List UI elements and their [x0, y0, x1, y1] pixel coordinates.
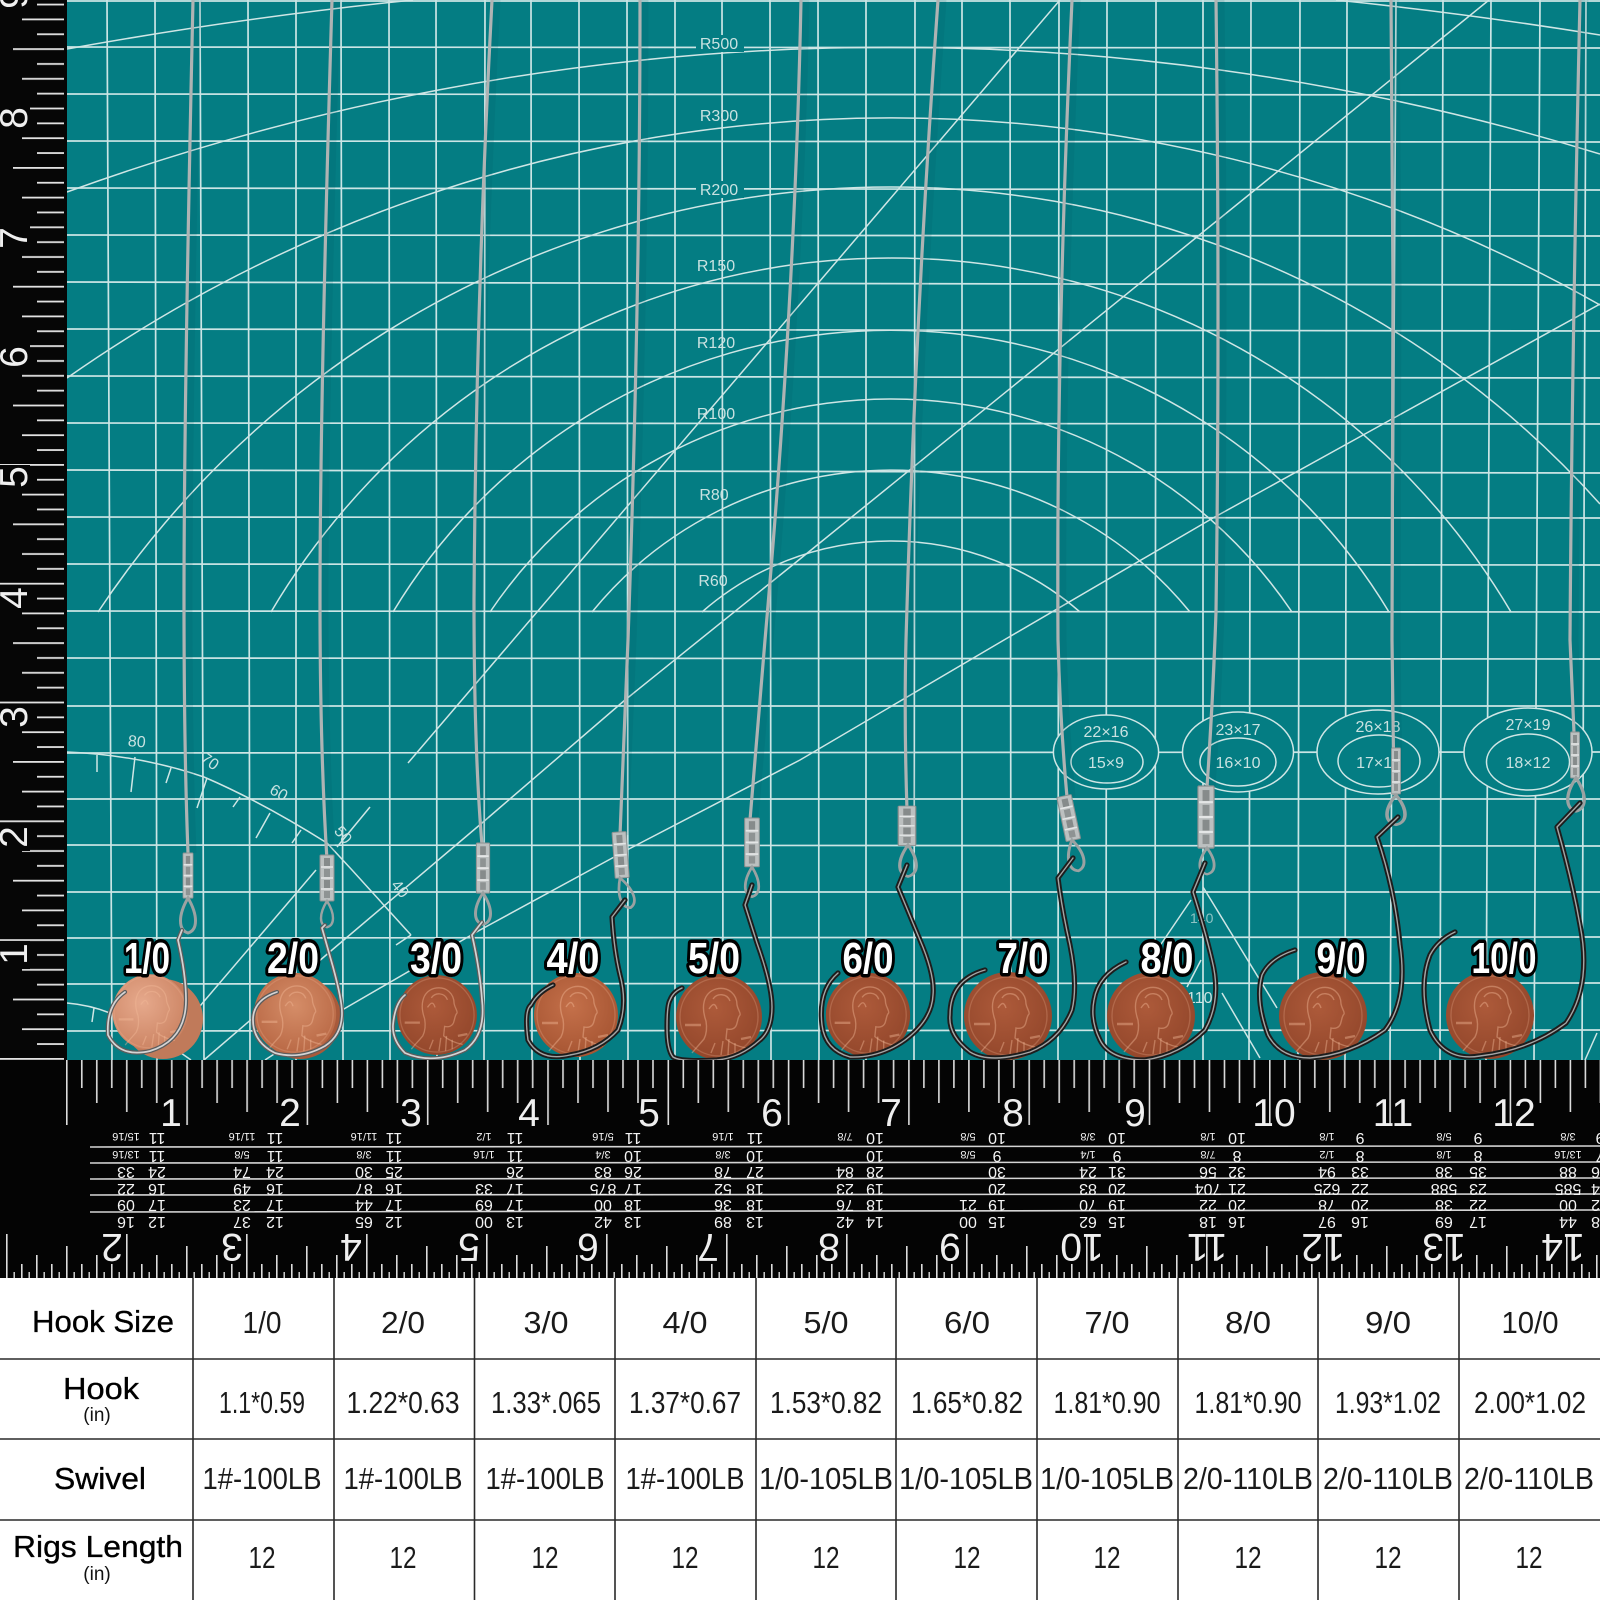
upside-down reference table values: 26	[506, 1163, 524, 1180]
hook 3/0	[393, 922, 483, 1058]
upside-down reference table values: 17	[506, 1196, 524, 1213]
upside-down reference table values: 16	[1351, 1213, 1369, 1230]
upside-down reference table values: 11	[267, 1129, 283, 1146]
size ellipses	[1053, 708, 1592, 796]
hook 5/0	[667, 885, 772, 1061]
upside-down reference table values: 13	[746, 1213, 764, 1230]
upside-down reference table values: 11	[386, 1129, 402, 1146]
upside-down reference table values	[112, 1129, 1600, 1230]
radius labels: R60	[698, 573, 728, 590]
upside-down reference table values: 65	[355, 1213, 373, 1230]
radius labels: R150	[697, 258, 735, 275]
row headers: Swivel	[54, 1461, 146, 1496]
upside-down reference table values: 23	[233, 1196, 251, 1213]
upside-down reference table values: 15	[1108, 1213, 1126, 1230]
ruler inch numbers: 1	[160, 1092, 182, 1135]
upside-down reference table values: 62	[1079, 1213, 1097, 1230]
left vertical ruler	[0, 0, 67, 1062]
upside-down reference table values: 1/2	[1319, 1148, 1335, 1160]
upside-down reference table values: 9	[1355, 1129, 1364, 1146]
row: hook dimensions: 1.22*0.63	[346, 1385, 460, 1420]
ruler inch numbers: 6	[761, 1092, 783, 1135]
hook size labels on photo: 1/0	[124, 934, 170, 983]
upside-down reference table values: 78	[1318, 1196, 1336, 1213]
row: rigs length: 12	[248, 1540, 276, 1575]
upside-down reference table values: 18	[624, 1196, 642, 1213]
upside-down reference table values: 12	[266, 1213, 284, 1230]
upside-down reference table values: 83	[594, 1163, 612, 1180]
upside-down reference table values: 16	[385, 1180, 403, 1197]
row: hook dimensions: 1.81*0.90	[1194, 1385, 1302, 1420]
upside-down reference table values: 30	[988, 1163, 1006, 1180]
upside-down reference table values: 22	[117, 1180, 135, 1197]
upside-down reference table values: 20	[988, 1180, 1006, 1197]
size ellipses: 27×19	[1506, 717, 1551, 734]
upside-down reference table values: 10	[624, 1147, 642, 1164]
row: hook size: 4/0	[662, 1305, 708, 1340]
row: hook size: 6/0	[944, 1305, 990, 1340]
row: hook dimensions: 1.1*0.59	[219, 1385, 305, 1420]
upside-down reference table values: 625	[1314, 1180, 1340, 1197]
upside-down reference table values: 27	[746, 1163, 764, 1180]
hook size labels on photo: 8/0	[1140, 934, 1194, 983]
upside-down reference table values: 10	[866, 1129, 884, 1146]
upside-down reference table values: 19	[1108, 1196, 1126, 1213]
radius labels: R120	[697, 335, 735, 352]
hook 1/0	[108, 930, 186, 1053]
upside-down reference table values: 42	[836, 1213, 854, 1230]
upside-down reference table values: 17	[1469, 1213, 1487, 1230]
upside-down reference table values: 1/4	[1080, 1148, 1096, 1160]
upside-down reference table values: 16	[266, 1180, 284, 1197]
ruler inch numbers: 4	[518, 1092, 540, 1135]
upside-down ruler numbers: 2	[101, 1225, 123, 1268]
upside-down reference table values: 94	[1318, 1163, 1336, 1180]
row: hook dimensions: 1.81*0.90	[1054, 1385, 1160, 1420]
protractor degree labels: 80	[127, 733, 146, 752]
crimp sleeves and wire loops	[180, 732, 1584, 933]
ruler inch numbers: 3	[400, 1092, 422, 1135]
upside-down reference table values: 19	[988, 1196, 1006, 1213]
upside-down reference table values: 30	[355, 1163, 373, 1180]
row: rigs length: 12	[1374, 1540, 1402, 1575]
upside-down reference table values: 588	[1431, 1180, 1457, 1197]
ruler inch numbers: 7	[880, 1092, 902, 1135]
upside-down reference table values: 17	[624, 1180, 642, 1197]
row headers: (in)	[83, 1564, 111, 1585]
upside-down reference table values: 78	[714, 1163, 732, 1180]
upside-down reference table values: 11	[625, 1129, 641, 1146]
row: swivel: 1#-100LB	[486, 1461, 604, 1496]
row: rigs length	[248, 1540, 1542, 1575]
row: rigs length: 12	[390, 1540, 416, 1575]
table rules	[0, 1278, 1600, 1600]
row: rigs length: 12	[532, 1540, 558, 1575]
row: swivel: 2/0-110LB	[1183, 1461, 1313, 1496]
upside-down reference table values: 17	[148, 1196, 166, 1213]
row headers: Rigs Length	[13, 1529, 183, 1564]
radius labels: R200	[700, 182, 738, 199]
upside-down reference table values: 76	[836, 1196, 854, 1213]
upside-down reference table values: 84	[836, 1163, 854, 1180]
upside-down reference table values: 89	[714, 1213, 732, 1230]
upside-down reference table values: 19	[866, 1180, 884, 1197]
upside-down reference table values: 22	[1351, 1180, 1369, 1197]
upside-down reference table values: 9	[1473, 1129, 1482, 1146]
radius labels: R500	[700, 36, 738, 53]
row: rigs length: 12	[1516, 1540, 1542, 1575]
hook size labels on photo: 9/0	[1316, 934, 1366, 983]
upside-down reference table values: 11	[747, 1129, 763, 1146]
upside-down ruler numbers: 11	[1187, 1225, 1227, 1268]
upside-down reference table values: 22	[1199, 1196, 1217, 1213]
protractor degree labels: 140	[1190, 910, 1214, 926]
upside-down reference table values: 18	[1199, 1213, 1217, 1230]
row: hook size: 5/0	[804, 1305, 848, 1340]
upside-down reference table values: 00	[1559, 1196, 1577, 1213]
row: hook size: 9/0	[1365, 1305, 1411, 1340]
protractor degree labels: 60	[266, 781, 290, 805]
row: swivel: 2/0-110LB	[1323, 1461, 1453, 1496]
row headers: Hook	[63, 1371, 140, 1406]
upside-down reference table values: 9	[1112, 1147, 1121, 1164]
upside-down reference table values: 11	[149, 1129, 165, 1146]
upside-down reference table values: 44	[1559, 1213, 1577, 1230]
upside-down reference table values: 87	[355, 1180, 373, 1197]
hook size labels on photo: 2/0	[267, 934, 319, 983]
upside-down reference table values: 18	[866, 1196, 884, 1213]
upside-down reference table values: 17	[385, 1196, 403, 1213]
upside-down reference table values: 20	[1228, 1196, 1246, 1213]
row: swivel: 1#-100LB	[626, 1461, 744, 1496]
upside-down reference table values: 09	[117, 1196, 135, 1213]
upside-down reference table values: 49	[233, 1180, 251, 1197]
ruler inch numbers: 10	[1252, 1092, 1296, 1135]
upside-down reference table values: 44	[355, 1196, 373, 1213]
upside-down reference table values: 37	[233, 1213, 251, 1230]
upside-down reference table values: 18	[746, 1180, 764, 1197]
size ellipses: 26×18	[1356, 719, 1401, 736]
upside-down ruler numbers: 5	[458, 1225, 480, 1268]
upside-down reference table values: 33	[117, 1163, 135, 1180]
hook 4/0	[527, 900, 625, 1057]
upside-down reference table values: 11/16	[351, 1130, 377, 1142]
row headers	[13, 1304, 183, 1585]
hook 10/0	[1424, 803, 1584, 1057]
upside-down reference table values: 1/8	[1436, 1148, 1452, 1160]
upside-down reference table values: 11	[267, 1147, 283, 1164]
upside-down reference table values: 00	[475, 1213, 493, 1230]
upside-down reference table values: 18	[746, 1196, 764, 1213]
upside-down reference table values: 69	[1435, 1213, 1453, 1230]
row: hook size	[242, 1305, 1558, 1340]
row: swivel	[202, 1461, 1594, 1496]
ruler inch numbers: 9	[1124, 1092, 1146, 1135]
upside-down reference table values: 16	[148, 1180, 166, 1197]
radius labels: R80	[699, 487, 729, 504]
upside-down reference table values: 12	[385, 1213, 403, 1230]
upside-down reference table values: 7/8	[837, 1130, 853, 1142]
upside-down reference table values: 20	[1108, 1180, 1126, 1197]
upside-down reference table values: 83	[1079, 1180, 1097, 1197]
radius labels	[696, 35, 744, 590]
upside-down ruler numbers: 12	[1301, 1225, 1345, 1268]
row: hook size: 2/0	[381, 1305, 425, 1340]
upside-down reference table values: 3/8	[1080, 1130, 1096, 1142]
size ellipses: 18×12	[1506, 755, 1551, 772]
row: hook dimensions: 1.33*.065	[491, 1385, 601, 1420]
upside-down reference table values: 5/8	[234, 1148, 250, 1160]
upside-down reference table values: 33	[475, 1180, 493, 1197]
upside-down reference table values: 33	[1351, 1163, 1369, 1180]
row: swivel: 1/0-105LB	[759, 1461, 893, 1496]
left ruler numbers	[0, 0, 36, 969]
upside-down reference table values: 1/8	[1200, 1130, 1216, 1142]
hook size labels on photo: 5/0	[688, 934, 740, 983]
size ellipses: 15×9	[1088, 755, 1124, 772]
upside-down ruler numbers: 7	[697, 1225, 719, 1268]
ruler inch numbers	[160, 1092, 1536, 1135]
panel: teal cutting mat	[67, 0, 1600, 1060]
upside-down reference table values: 15	[988, 1213, 1006, 1230]
upside-down reference table values: 69	[475, 1196, 493, 1213]
upside-down reference table values: 22	[1469, 1196, 1487, 1213]
protractor degree labels: 70	[197, 750, 222, 774]
upside-down ruler numbers	[101, 1225, 1585, 1268]
upside-down reference table values: 56	[1199, 1163, 1217, 1180]
upside-down reference table values: 1/16	[473, 1148, 495, 1160]
upside-down reference table values: 9	[992, 1147, 1001, 1164]
upside-down reference table values: 88	[1559, 1163, 1577, 1180]
upside-down reference table values: 38	[1435, 1163, 1453, 1180]
size ellipses: 16×10	[1216, 755, 1261, 772]
row: hook dimensions: 1.53*0.82	[770, 1385, 882, 1420]
upside-down reference table values: 3/8	[715, 1148, 731, 1160]
upside-down ruler numbers: 13	[1422, 1225, 1466, 1268]
upside-down reference table values: 23	[836, 1180, 854, 1197]
upside-down reference table values: 74	[233, 1163, 251, 1180]
bottom horizontal ruler	[0, 1060, 1600, 1278]
hook size labels on photo	[124, 934, 1536, 983]
upside-down ruler numbers: 9	[939, 1225, 961, 1268]
upside-down reference table values: 00	[959, 1213, 977, 1230]
row headers: (in)	[83, 1405, 111, 1426]
radius labels: R300	[700, 108, 738, 125]
size ellipses: 17×11	[1356, 755, 1400, 772]
upside-down reference table values: 24	[266, 1163, 284, 1180]
protractor degree labels: 110	[1187, 990, 1213, 1007]
upside-down ruler numbers: 10	[1060, 1225, 1104, 1268]
specification table	[0, 1278, 1600, 1600]
upside-down ruler numbers: 8	[818, 1225, 840, 1268]
size ellipses: 22×16	[1084, 724, 1129, 741]
upside-down ruler numbers: 3	[221, 1225, 243, 1268]
upside-down reference table values: 8	[1355, 1147, 1364, 1164]
upside-down reference table values: 7/8	[1200, 1148, 1216, 1160]
upside-down reference table values: 11	[507, 1129, 523, 1146]
upside-down reference table values: 17	[506, 1180, 524, 1197]
upside-down reference table values: 1/16	[712, 1130, 734, 1142]
row: rigs length: 12	[1234, 1540, 1262, 1575]
upside-down reference table values: 11	[507, 1147, 523, 1164]
upside-down reference table values: 13/16	[112, 1148, 140, 1160]
upside-down ruler numbers: 14	[1541, 1225, 1585, 1268]
ruler inch numbers: 2	[279, 1092, 301, 1135]
hook 8/0	[1093, 863, 1216, 1060]
row: hook dimensions: 1.65*0.82	[911, 1385, 1023, 1420]
row: swivel: 1/0-105LB	[1040, 1461, 1174, 1496]
upside-down reference table values: 13	[506, 1213, 524, 1230]
upside-down reference table values: 24	[148, 1163, 166, 1180]
ruler inch numbers: 8	[1002, 1092, 1024, 1135]
upside-down reference table values: 10	[746, 1147, 764, 1164]
row: hook dimensions: 1.93*1.02	[1335, 1385, 1441, 1420]
upside-down reference table values: 16	[1228, 1213, 1246, 1230]
upside-down reference table values: 5/8	[1436, 1130, 1452, 1142]
upside-down reference table values: 10	[1108, 1129, 1126, 1146]
hook 2/0	[253, 925, 342, 1055]
upside-down reference table rules	[90, 1146, 1600, 1212]
hook size labels on photo: 4/0	[546, 934, 600, 983]
hook size labels on photo: 6/0	[842, 934, 894, 983]
row: swivel: 1#-100LB	[344, 1461, 462, 1496]
radius arcs	[67, 0, 1600, 612]
hook size labels on photo: 3/0	[410, 934, 462, 983]
row: hook size: 8/0	[1225, 1305, 1271, 1340]
row headers: Hook Size	[32, 1304, 174, 1339]
row: hook size: 10/0	[1502, 1305, 1558, 1340]
upside-down reference table values: 42	[594, 1213, 612, 1230]
row: hook size: 7/0	[1084, 1305, 1130, 1340]
protractor degree labels: 50	[330, 823, 355, 848]
upside-down reference table values: 8	[1473, 1147, 1482, 1164]
upside-down reference table values: 70	[1079, 1196, 1097, 1213]
upside-down reference table values: 3/8	[356, 1148, 372, 1160]
row: hook dimensions: 1.37*0.67	[629, 1385, 741, 1420]
upside-down reference table values: 1/8	[1319, 1130, 1335, 1142]
row: rigs length: 12	[812, 1540, 840, 1575]
size ellipses: 23×17	[1216, 722, 1261, 739]
upside-down reference table values: 32	[1228, 1163, 1246, 1180]
ruler inch numbers: 12	[1492, 1092, 1536, 1135]
row: hook dimensions	[219, 1385, 1586, 1420]
upside-down reference table values: 36	[714, 1196, 732, 1213]
hook 7/0	[950, 858, 1075, 1058]
row: hook size: 3/0	[524, 1305, 568, 1340]
row: hook size: 1/0	[242, 1305, 282, 1340]
upside-down reference table values: 5/16	[592, 1130, 614, 1142]
mat grid lines	[67, 0, 1600, 1060]
upside-down reference table values: 23	[1469, 1180, 1487, 1197]
radius labels: R100	[697, 406, 735, 423]
upside-down reference table values: 3/8	[1560, 1130, 1576, 1142]
upside-down reference table values: 26	[624, 1163, 642, 1180]
row: rigs length: 12	[1094, 1540, 1120, 1575]
protractor degree labels	[127, 733, 1214, 1007]
hooks	[108, 803, 1584, 1061]
upside-down reference table values: 17	[266, 1196, 284, 1213]
upside-down reference table values: 8	[1232, 1147, 1241, 1164]
upside-down reference table values: 52	[714, 1180, 732, 1197]
upside-down reference table values: 35	[1469, 1163, 1487, 1180]
upside-down reference table values: 20	[1351, 1196, 1369, 1213]
row: rigs length: 12	[954, 1540, 980, 1575]
upside-down reference table values: 10	[866, 1147, 884, 1164]
ruler inch numbers: 5	[638, 1092, 660, 1135]
upside-down reference table values: 31	[1108, 1163, 1126, 1180]
row: swivel: 1/0-105LB	[899, 1461, 1033, 1496]
upside-down reference table values: 875	[590, 1180, 616, 1197]
upside-down reference table values: 1/2	[476, 1130, 492, 1142]
hook size labels on photo: 7/0	[998, 934, 1048, 983]
upside-down reference table values: 15/16	[112, 1130, 140, 1142]
upside-down reference table values: 3/4	[595, 1148, 611, 1160]
protractor degree labels: 40	[387, 877, 412, 902]
upside-down reference table values: 585	[1555, 1180, 1581, 1197]
row: swivel: 1#-100LB	[202, 1461, 322, 1496]
upside-down reference table values: 14	[866, 1213, 884, 1230]
upside-down ruler numbers: 6	[577, 1225, 599, 1268]
upside-down reference table values: 97	[1318, 1213, 1336, 1230]
leader wires	[184, 0, 1585, 860]
upside-down reference table values: 11	[149, 1147, 165, 1164]
upside-down reference table values: 5/8	[960, 1148, 976, 1160]
upside-down reference table values: 5/8	[960, 1130, 976, 1142]
diagonal guide lines	[200, 0, 1600, 1060]
upside-down reference table values: 21	[959, 1196, 977, 1213]
upside-down reference table values: 38	[1435, 1196, 1453, 1213]
upside-down reference table values: 11/16	[229, 1130, 255, 1142]
hook 6/0	[821, 865, 933, 1057]
upside-down reference table values: 10	[1228, 1129, 1246, 1146]
upside-down reference table values: 11	[386, 1147, 402, 1164]
upside-down reference table values: 28	[866, 1163, 884, 1180]
row: rigs length: 12	[672, 1540, 698, 1575]
upside-down reference table values: 25	[385, 1163, 403, 1180]
upside-down ruler numbers: 4	[340, 1225, 362, 1268]
upside-down reference table values: 13	[624, 1213, 642, 1230]
pennies for scale	[112, 971, 1534, 1060]
upside-down reference table values: 00	[594, 1196, 612, 1213]
protractor scale	[67, 752, 411, 1060]
upside-down reference table values: 16	[117, 1213, 135, 1230]
upside-down reference table values: 13/16	[1554, 1148, 1582, 1160]
ruler inch numbers: 11	[1373, 1092, 1413, 1135]
upside-down reference table values: 12	[148, 1213, 166, 1230]
upside-down reference table values: 24	[1079, 1163, 1097, 1180]
hook 9/0	[1260, 817, 1402, 1058]
upside-down reference table values: 10	[988, 1129, 1006, 1146]
upside-down reference table values: 704	[1195, 1180, 1221, 1197]
upside-down reference table values: 21	[1228, 1180, 1246, 1197]
hook size labels on photo: 10/0	[1472, 934, 1536, 983]
